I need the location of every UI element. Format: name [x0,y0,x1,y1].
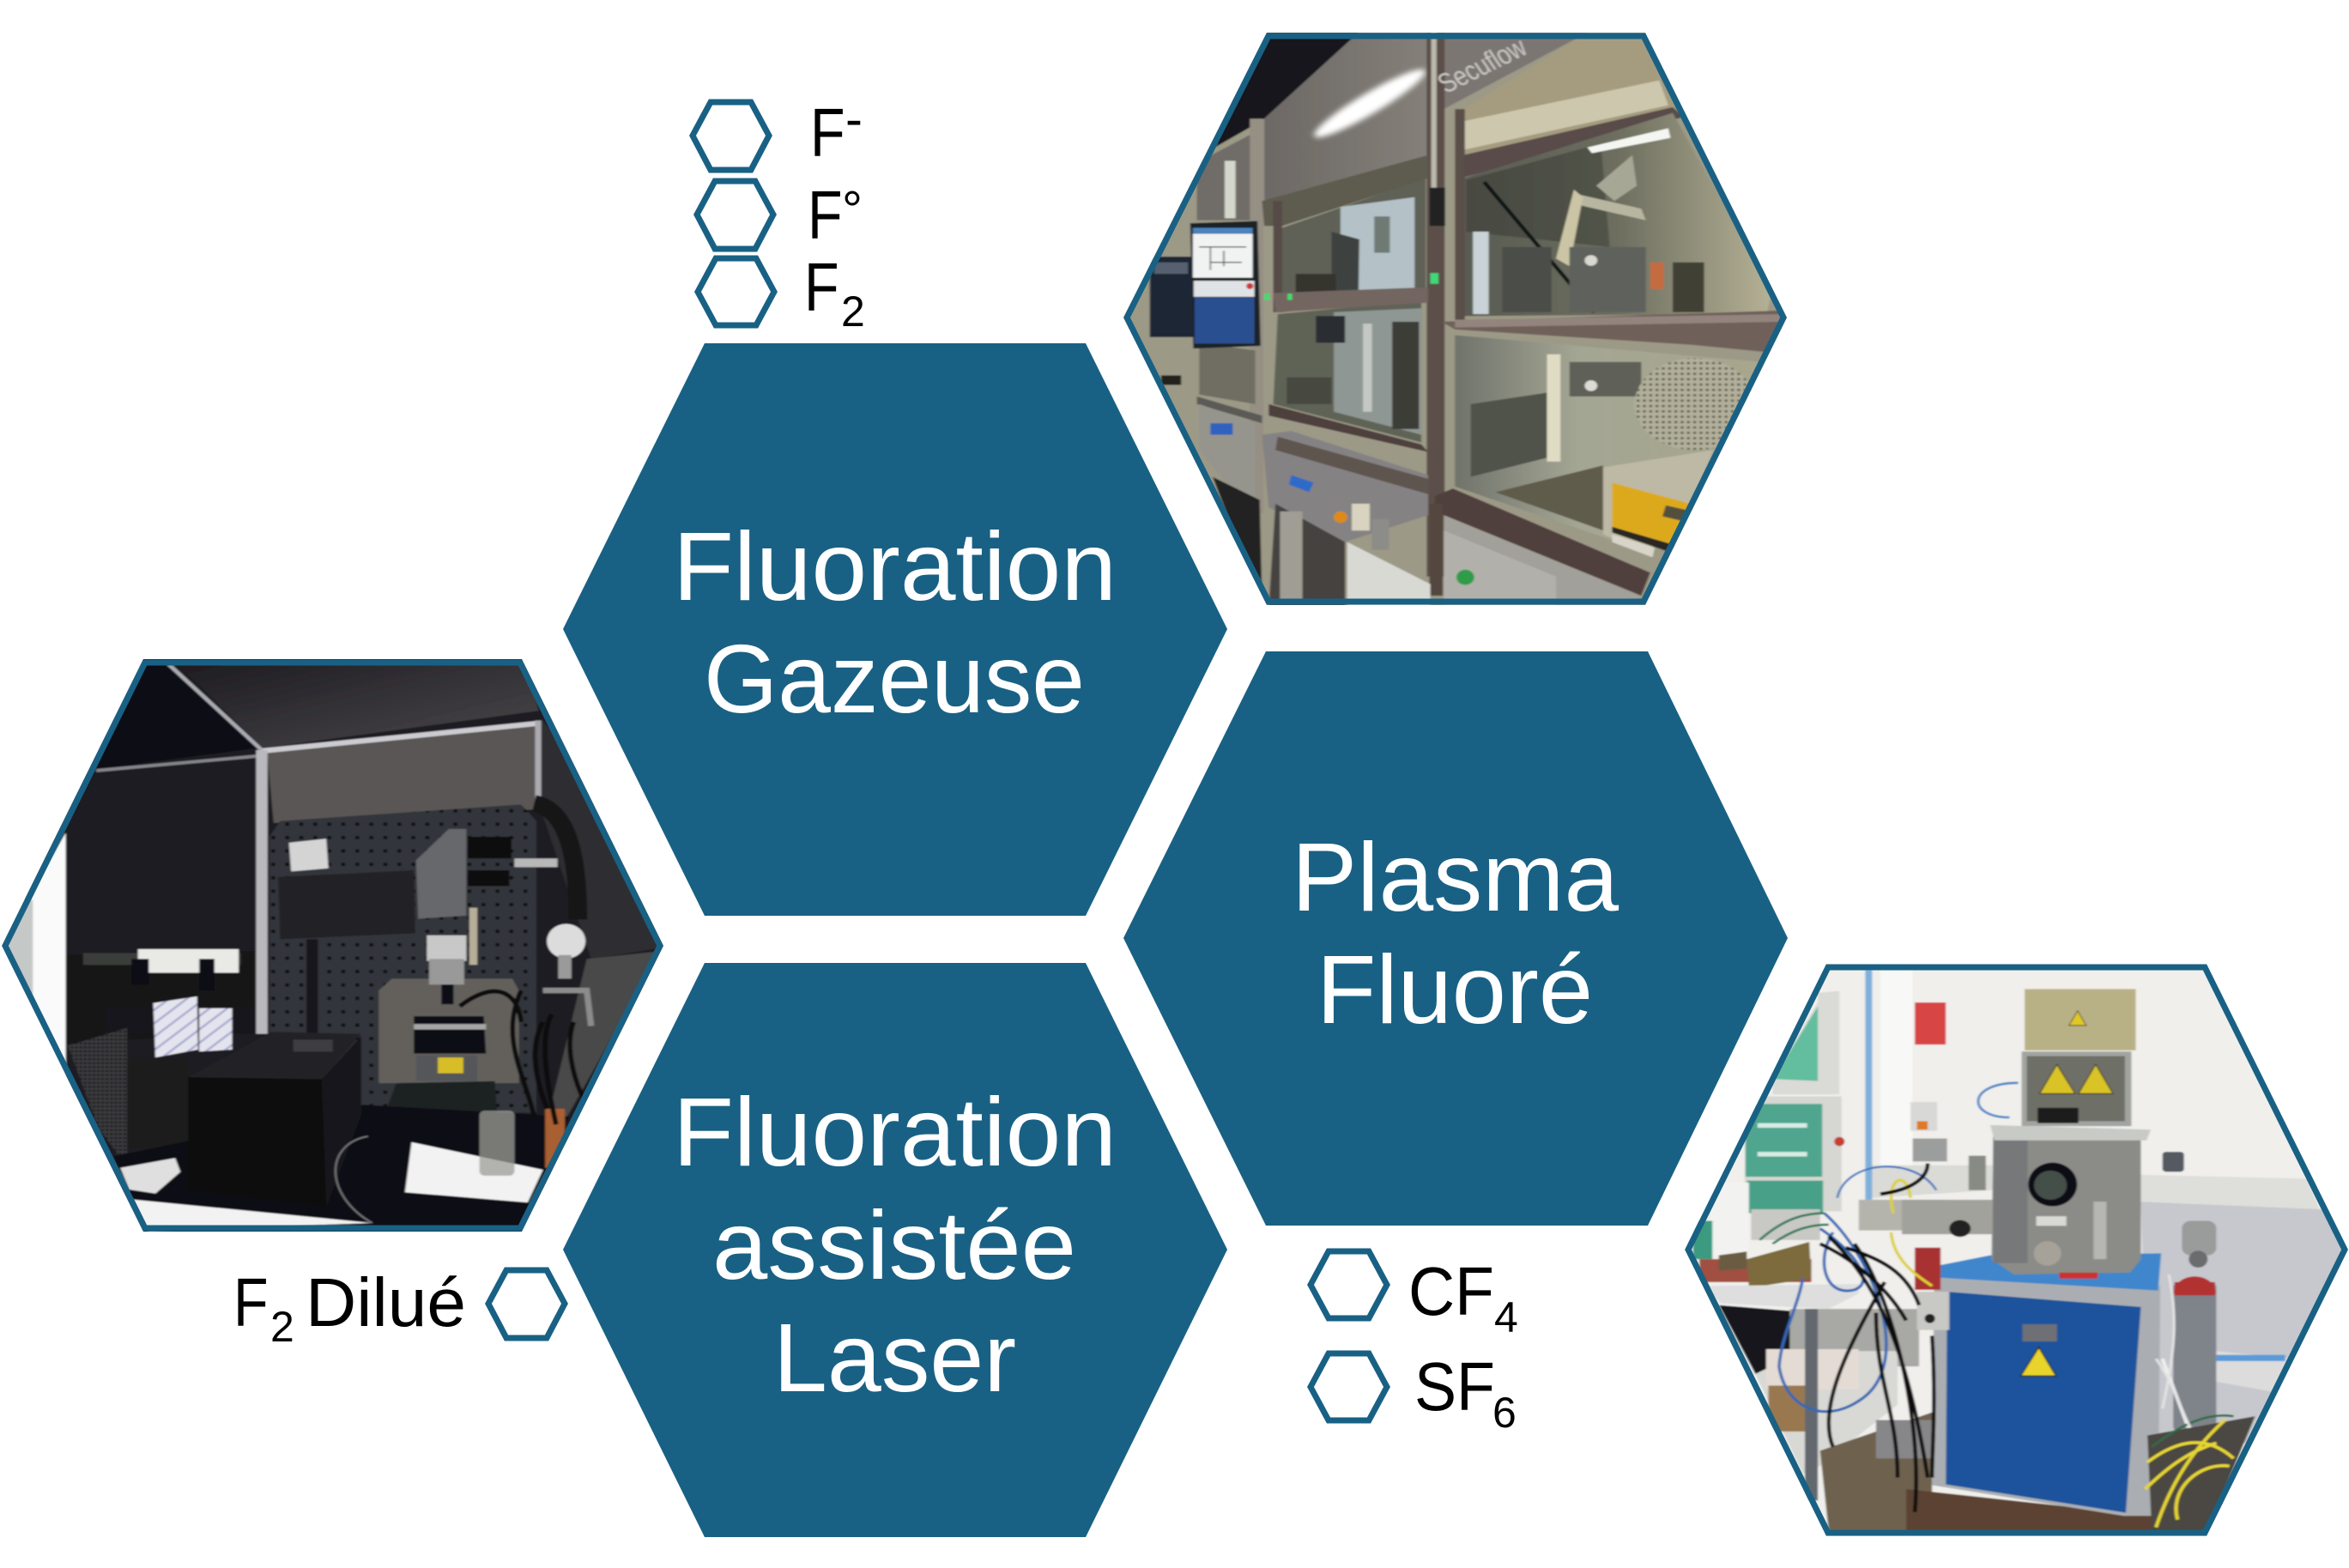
table [114,1105,569,1227]
console: lower left [1262,431,1428,542]
heading: Plasma Fluoré: Plasma [1292,823,1619,931]
cabinets [1772,991,1839,1094]
label: SF6: SF [1414,1348,1495,1425]
icon: small hexagon SF6 [1311,1353,1387,1420]
window: lower right [1455,336,1763,552]
wall panel: dark schematic [1150,257,1195,337]
label: F2 [804,249,865,336]
photo: plasma reactor [1674,953,2349,1553]
hexagon: Fluoration assistée Laser [563,963,1227,1537]
breadboard [269,804,536,1112]
desk items [83,953,241,965]
window: upper right [1464,113,1771,316]
photo outline [1127,36,1783,602]
label: F2: F [804,249,839,325]
icon: small hexagon F- [693,102,769,170]
label: CF4: CF [1408,1253,1494,1329]
label: F°: F [808,177,843,253]
heading: Fluoration Gazeuse: Fluoration [673,512,1117,621]
icon: small hexagon F2 Dilué [488,1270,565,1338]
label: Secuflow: Secuflow [1432,33,1533,100]
icon: small hexagon CF4 [1311,1251,1387,1318]
heading: Fluoration assistée Laser: Laser [773,1304,1016,1412]
black box [188,1032,361,1079]
label: CF4: 4 [1494,1293,1518,1341]
hose and gauge [534,803,578,919]
label: SF6: 6 [1492,1389,1517,1437]
label: F-: F [810,94,845,171]
heading: Fluoration assistée Laser: Fluoration [673,1078,1117,1186]
top hood [2025,989,2136,1050]
label: F2 Dilué: F [233,1264,269,1341]
label: F2 Dilué [233,1264,466,1351]
heading: Fluoration Gazeuse [673,512,1117,733]
gas cylinder [2173,1282,2216,1432]
heading: Fluoration Gazeuse: Gazeuse [704,625,1085,733]
label: F2: 2 [841,288,865,336]
label: F2 Dilué: Dilué [306,1264,466,1341]
icon: small hexagon F° [697,181,773,249]
bottom right floor [2147,1416,2255,1531]
table [1699,1259,1812,1282]
cabinet frame [1932,1274,2160,1516]
label: F2 Dilué: 2 [270,1303,294,1351]
frame bars [168,664,263,751]
icon: small hexagon F2 [698,258,774,325]
photo outline [5,663,660,1228]
window: lower left [1274,300,1421,443]
photo outline [1688,967,2345,1533]
photo: laser fluorination bench [2,659,663,1232]
window: upper left [1282,178,1426,312]
heading: Plasma Fluoré: Fluoré [1317,935,1593,1044]
label: F°: ° [842,181,863,239]
photo: fume hoods (Secuflow) [1123,33,1787,605]
heading: Plasma Fluoré [1292,823,1619,1044]
side tube [1857,1199,1904,1231]
cables [2146,1420,2233,1528]
hexagon: Fluoration Gazeuse [563,343,1227,916]
monitor [1190,221,1261,348]
heading: Fluoration assistée Laser: assistée [712,1191,1076,1299]
label: F-: - [845,90,863,148]
chamber [1991,1136,2141,1274]
band: sash [1442,310,1789,354]
hexagon: Plasma Fluoré [1123,651,1788,1226]
heading: Fluoration assistée Laser [673,1078,1117,1412]
rail: lower sash [1435,488,1650,596]
